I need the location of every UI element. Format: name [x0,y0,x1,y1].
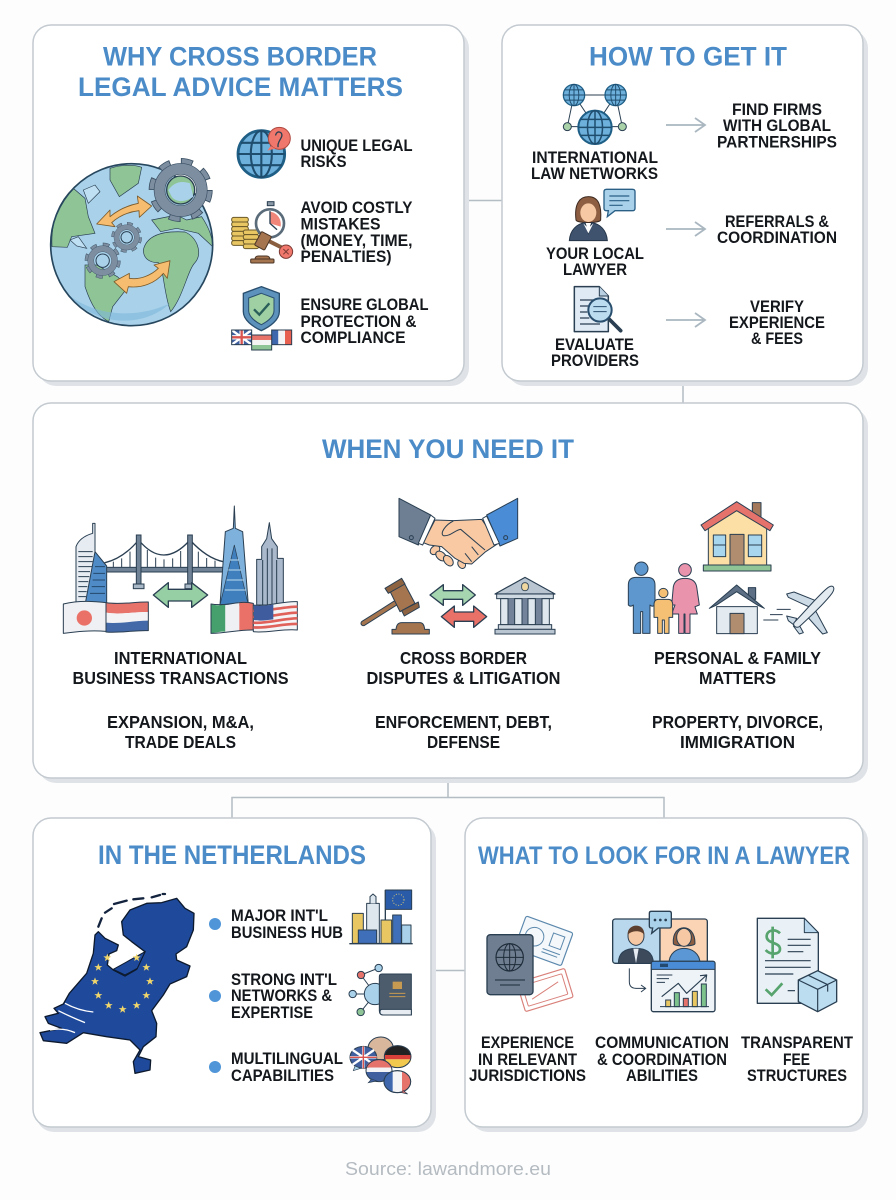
text: unique legal risks: RISKS [300,153,346,171]
text: verify experience and fees: & FEES [751,330,803,348]
illustration: family, houses and plane [628,502,834,634]
text: transparent fee structures [741,1034,853,1085]
text: evaluate providers: PROVIDERS [551,352,639,370]
heading: in the netherlands: IN THE NETHERLANDS [98,840,366,870]
icon: local lawyer with speech bubble [569,189,635,241]
heading: why cross border [78,42,403,102]
text: verify experience and fees: EXPERIENCE [729,314,825,332]
source line: Source: lawandmore.eu [345,1158,551,1179]
icon: network and book [349,964,411,1016]
illustration: skylines, bridge and flags [63,506,297,633]
text: transparent fee structures: STRUCTURES [747,1067,847,1085]
text: referrals and coordination [717,213,837,247]
text: your local lawyer: YOUR LOCAL [546,245,644,263]
heading: why cross border: WHY CROSS BORDER [103,42,377,72]
connector lines [232,200,683,970]
icon: invoice and box [757,918,837,1012]
text: personal and family matters [652,648,823,752]
heading: why cross border: LEGAL ADVICE MATTERS [78,72,403,102]
icon: city with eu flag [349,890,413,944]
text: unique legal risks: UNIQUE LEGAL [300,137,412,155]
panel: in the netherlands [33,818,436,1132]
text: experience in relevant jurisdictions: EXPERIENCE [481,1034,574,1052]
panel: how to get it [502,25,868,386]
arrow [666,313,705,327]
text: international law networks: LAW NETWORKS [531,165,658,183]
icon: passport and stamps [487,916,573,1012]
text: avoid costly mistakes [300,199,412,266]
text: personal and family matters: PERSONAL & FAMILY [654,648,821,668]
text: multilingual capabilities: MULTILINGUAL [231,1050,343,1068]
text: evaluate providers: EVALUATE [555,336,634,354]
text: multilingual capabilities [231,1050,343,1085]
text: international business transactions: EXPANSION, M&A, [107,712,254,732]
text: your local lawyer [546,245,644,279]
text: experience in relevant jurisdictions: JURISDICTIONS [469,1067,586,1085]
text: transparent fee structures: FEE [783,1051,810,1069]
text: verify experience and fees [729,298,825,348]
icon: network of globes [563,84,626,144]
text: cross border disputes and litigation: DEFENSE [427,732,500,752]
heading: how to get it: HOW TO GET IT [589,42,787,72]
text: avoid costly mistakes: (MONEY, TIME, [300,232,412,250]
text: major international business hub [231,907,343,942]
text: cross border disputes and litigation: CROSS BORDER [400,648,527,668]
text: international law networks: INTERNATIONAL [532,149,658,167]
icon: globe with question bubble [238,127,290,177]
text: personal and family matters: IMMIGRATION [680,732,795,752]
text: international business transactions: BUSINESS TRANSACTIONS [72,668,288,688]
gears [89,165,206,275]
illustration: globe with gears and arrows [51,164,213,326]
text: cross border disputes and litigation [366,648,560,752]
text: avoid costly mistakes: MISTAKES [300,216,380,234]
text: major international business hub: BUSINESS HUB [231,924,343,942]
text: experience in relevant jurisdictions [469,1034,586,1085]
text: find firms with global partnerships: WITH GLOBAL [723,117,831,135]
heading: when you need it: WHEN YOU NEED IT [322,434,574,464]
icon: courthouse [495,577,555,634]
text: referrals and coordination: REFERRALS & [725,213,829,231]
text: personal and family matters: MATTERS [699,668,776,688]
text: experience in relevant jurisdictions: IN RELEVANT [478,1051,577,1069]
text: communication and coordination abilities [595,1034,729,1085]
text: international business transactions: TRADE DEALS [125,732,236,752]
text: strong international networks [231,971,337,1022]
heading: what to look for in a lawyer: WHAT TO LOOK FOR IN A LAWYER [478,842,850,870]
text: cross border disputes and litigation: ENFORCEMENT, DEBT, [375,712,552,732]
text: find firms with global partnerships: PARTNERSHIPS [717,134,837,152]
bullet dots [209,918,221,1073]
text: cross border disputes and litigation: DISPUTES & LITIGATION [366,668,560,688]
text: ensure global protection [300,296,428,347]
text: find firms with global partnerships [717,101,837,152]
text: communication and coordination abilities: ABILITIES [626,1067,698,1085]
text: international business transactions [72,648,288,752]
text: multilingual capabilities: CAPABILITIES [231,1067,334,1085]
arrow [666,118,705,132]
icon: coins, stopwatch and gavel [232,202,293,263]
text: avoid costly mistakes: AVOID COSTLY [300,199,412,217]
text: transparent fee structures: TRANSPARENT [741,1034,853,1052]
icon: shield with flags [232,287,292,350]
text: evaluate providers [551,336,639,370]
text: your local lawyer: LAWYER [563,261,627,279]
text: communication and coordination abilities: & COORDINATION [597,1051,727,1069]
orange arrows [97,196,152,227]
text: avoid costly mistakes: PENALTIES) [300,248,392,266]
text: strong international networks: EXPERTISE [231,1004,313,1022]
text: strong international networks: STRONG INT'L [231,971,337,989]
panel: why cross border legal advice matters [33,25,469,386]
text: international business transactions: INTERNATIONAL [114,648,247,668]
text: verify experience and fees: VERIFY [750,298,804,316]
panel: what to look for in a lawyer [465,818,868,1132]
text: strong international networks: NETWORKS & [231,987,332,1005]
text: communication and coordination abilities: COMMUNICATION [595,1034,729,1052]
text: ensure global protection: ENSURE GLOBAL [300,296,428,314]
icon: document with magnifier [574,287,621,332]
panel: when you need it [33,403,868,783]
illustration: handshake, gavel, arrows and courthouse [363,498,518,634]
icon: video call and chart [613,911,715,1012]
text: personal and family matters: PROPERTY, DIVORCE, [652,712,823,732]
icon: flag speech bubbles [350,1037,411,1094]
text: find firms with global partnerships: FIND FIRMS [732,101,822,119]
text: ensure global protection: COMPLIANCE [300,329,406,347]
text: unique legal risks [300,137,412,171]
map: netherlands with eu stars [40,894,194,1073]
text: major international business hub: MAJOR INT'L [231,907,328,925]
text: ensure global protection: PROTECTION & [300,313,417,331]
text: referrals and coordination: COORDINATION [717,229,837,247]
arrow [666,222,705,236]
text: international law networks [531,149,658,183]
